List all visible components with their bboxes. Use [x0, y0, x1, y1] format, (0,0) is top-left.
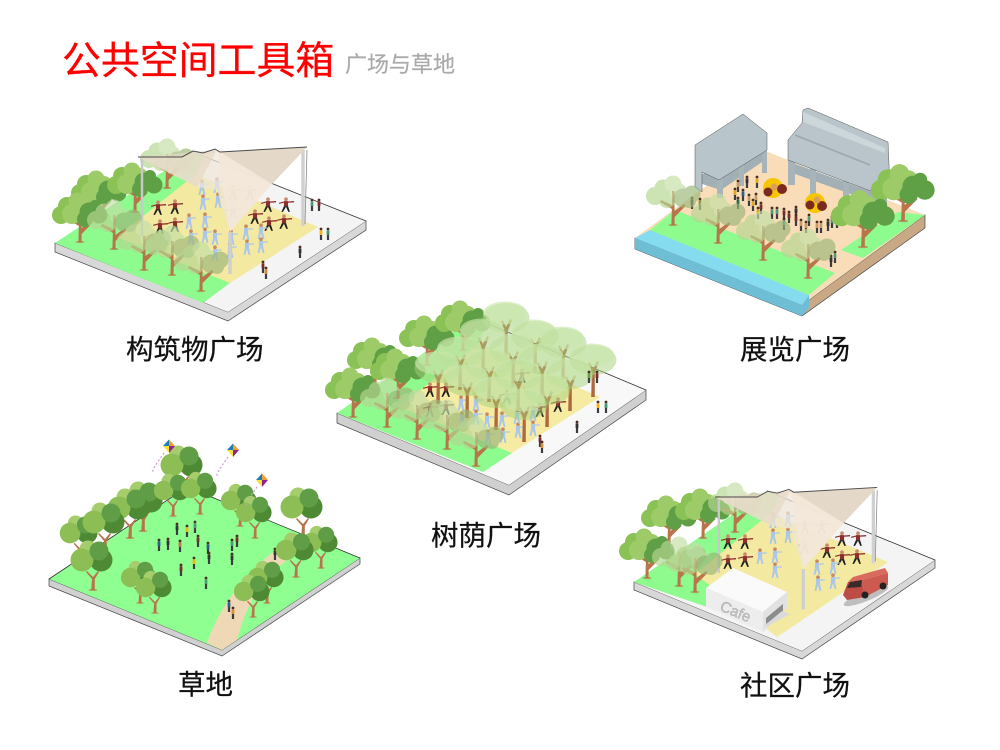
lawn trees front	[360, 378, 504, 467]
dancers	[151, 177, 294, 261]
subtitle: 广场与草地	[345, 52, 455, 77]
label: lawn: 草地	[178, 669, 233, 700]
canopy trees	[414, 302, 616, 442]
plaza paving	[695, 513, 888, 637]
platform	[49, 487, 360, 656]
panel: exhibition plaza	[635, 108, 935, 316]
lawn	[55, 152, 230, 303]
pedestrians	[539, 371, 607, 453]
dancers	[721, 511, 866, 591]
plaza paving	[399, 344, 600, 453]
tensile canopy	[715, 487, 877, 609]
platform	[635, 148, 925, 316]
lawn	[634, 491, 780, 607]
panel: lawn	[49, 440, 360, 656]
panel: tree shade plaza	[325, 300, 646, 495]
pedestrians	[262, 199, 329, 279]
front trees	[60, 502, 314, 618]
lawns	[650, 210, 925, 295]
platform	[634, 491, 935, 659]
panel: community plaza	[619, 482, 935, 659]
people	[158, 521, 276, 619]
kites	[152, 440, 268, 507]
back trees	[52, 138, 194, 243]
plaza paving	[117, 174, 318, 283]
label: exhibition plaza: 展览广场	[740, 334, 850, 365]
river	[635, 230, 809, 316]
platform	[55, 152, 366, 321]
panel: structure plaza	[52, 138, 366, 321]
tensile canopy	[138, 147, 307, 274]
front trees	[87, 200, 228, 292]
footpath	[207, 552, 287, 650]
lawn	[337, 318, 512, 472]
cafe building	[706, 568, 790, 632]
red van	[842, 568, 890, 610]
building: right hall	[788, 108, 890, 207]
label: tree shade plaza: 树荫广场	[431, 520, 541, 551]
left trees back	[325, 300, 490, 418]
back trees	[619, 482, 762, 579]
front trees	[652, 536, 722, 593]
label: community plaza: 社区广场	[740, 670, 850, 701]
title: 公共空间工具箱	[62, 40, 334, 83]
cafe sign: Cafe	[717, 598, 753, 626]
trees	[646, 164, 935, 279]
lion dance performers	[763, 178, 827, 213]
building: left hall	[695, 114, 767, 198]
dancers	[423, 368, 566, 445]
platform	[337, 318, 646, 495]
crowd	[691, 176, 838, 267]
label: structure plaza: 构筑物广场	[126, 334, 264, 365]
back trees	[108, 446, 338, 569]
